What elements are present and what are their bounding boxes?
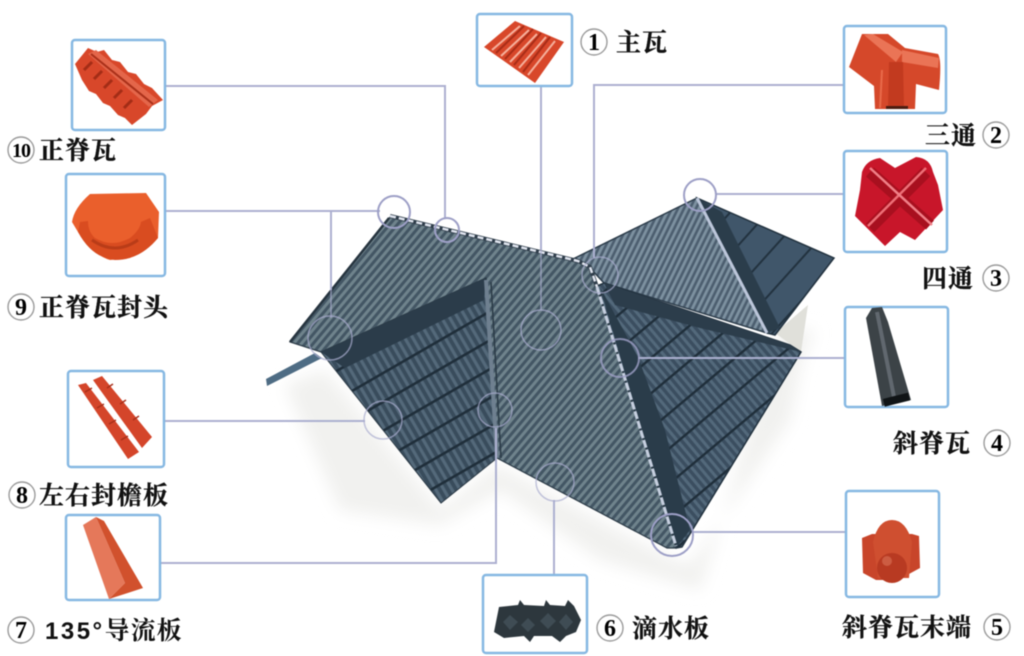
panel: 3 four-way ridge (844, 151, 1009, 293)
icon: deflector (83, 517, 143, 599)
icon: hip ridge tile (866, 307, 911, 407)
icon: ridge end cap (72, 193, 159, 260)
label: 3 four-way ridge: 3 (990, 266, 1002, 292)
panel: 8 side eave board (9, 371, 169, 510)
panel: 2 three-way ridge (844, 26, 1009, 150)
label: 1 main tile (581, 29, 668, 57)
label: 6 drip board: 6 (604, 616, 616, 642)
right roof slope (597, 283, 801, 548)
panel: 1 main tile (477, 14, 668, 86)
icon: side eave boards (78, 376, 152, 459)
label: 8 side eave board: 8 (16, 483, 28, 509)
label: 4 hip ridge tile: 斜脊瓦 (893, 430, 971, 458)
label: 10 ridge tile: 10 (12, 140, 31, 162)
label: 2 three-way ridge (925, 122, 1009, 150)
label: 1 main tile: 1 (588, 30, 600, 56)
far right roof slope (697, 198, 834, 335)
label: 4 hip ridge tile (893, 430, 1010, 458)
panel: 6 drip board (483, 575, 710, 653)
connector lines (160, 85, 846, 575)
label: 2 three-way ridge: 三通 (925, 122, 977, 150)
eave overhang (266, 353, 322, 386)
icon: ridge tile (75, 48, 163, 125)
icon: four-way ridge (855, 157, 943, 246)
icon: three-way ridge (849, 34, 940, 109)
panel: 7 135 degree deflector (8, 515, 183, 645)
panel: 4 hip ridge tile (845, 307, 1010, 458)
callout circles (308, 179, 716, 556)
upper right roof slope (575, 198, 767, 333)
label: 10 ridge tile (8, 137, 117, 165)
icon: main tile (484, 21, 564, 83)
label: 9 ridge end cap: 9 (15, 295, 27, 321)
label: 6 drip board: 滴水板 (632, 614, 710, 643)
label: 5 hip ridge end: 斜脊瓦末端 (842, 614, 972, 642)
label: 7 135 degree deflector: 7 (15, 618, 27, 644)
lower left roof slope (321, 278, 497, 503)
left eave edge (290, 218, 389, 342)
label: 3 four-way ridge: 四通 (922, 265, 974, 293)
label: 6 drip board (597, 614, 710, 643)
main ridge (390, 216, 597, 287)
label: 9 ridge end cap: 正脊瓦封头 (39, 293, 170, 322)
panel: 10 ridge tile (8, 40, 165, 165)
valley strip (486, 280, 497, 458)
icon: hip ridge end (862, 520, 920, 583)
icon: drip board (494, 600, 581, 642)
roof illustration (266, 198, 834, 590)
panel: 5 hip ridge end (842, 491, 1010, 642)
label: 10 ridge tile: 正脊瓦 (39, 137, 117, 165)
label: 2 three-way ridge: 2 (990, 123, 1002, 149)
centre and rear roof slope (290, 217, 676, 548)
label: 4 hip ridge tile: 4 (991, 431, 1003, 457)
label: 5 hip ridge end: 5 (991, 615, 1003, 641)
hip ridge lines (597, 287, 676, 546)
label: 3 four-way ridge (922, 265, 1009, 293)
label: 1 main tile: 主瓦 (616, 29, 668, 57)
roof cast shadow (285, 330, 815, 590)
label: 7 135 degree deflector: 135°导流板 (45, 616, 183, 645)
label: 8 side eave board: 左右封檐板 (39, 481, 169, 510)
panel: 9 ridge end cap (8, 174, 170, 322)
